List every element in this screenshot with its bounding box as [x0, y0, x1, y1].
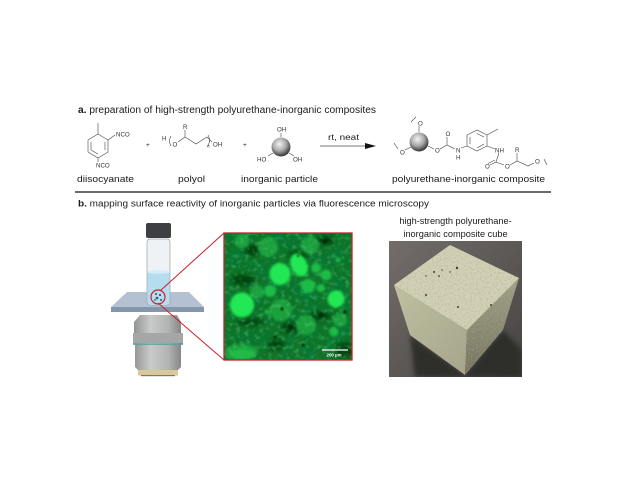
glass slide [111, 292, 204, 312]
reaction arrow: rt, neat [328, 132, 360, 142]
structure: composite: O [400, 150, 405, 156]
structure: inorganic particle: HO [257, 156, 266, 164]
heading a: a. preparation of high-strength polyurethane-inorganic composites [78, 105, 376, 116]
reaction arrow [320, 132, 376, 149]
cube caption: inorganic composite cube [403, 229, 508, 239]
structure: composite: O [435, 148, 440, 154]
structure: composite: O [418, 120, 423, 128]
structure: composite [394, 117, 547, 170]
frame [224, 233, 352, 360]
cube caption: high-strength polyurethane- [399, 216, 512, 226]
label: composite: polyurethane-inorganic composite [392, 174, 545, 184]
structure: composite: R [515, 147, 520, 154]
speckle noise [224, 233, 352, 360]
structure: inorganic particle [257, 126, 302, 164]
structure: polyol: R [183, 124, 188, 131]
dark mottling [224, 233, 352, 360]
fluorescence micrograph [224, 233, 355, 360]
structure: inorganic particle: OH [277, 126, 286, 134]
infographic [75, 106, 551, 377]
label: diisocyanate: diisocyanate [77, 174, 134, 184]
objective lens [133, 315, 183, 376]
photo of composite cube [389, 241, 522, 377]
bright blobs [230, 251, 344, 318]
cube right face [465, 278, 519, 375]
label: polyol: polyol [178, 174, 205, 184]
scale label: 200 µm [326, 352, 342, 358]
microscope illustration [111, 223, 224, 376]
structure: inorganic particle: OH [293, 156, 302, 164]
structure: composite: O [485, 164, 490, 170]
divider [75, 191, 551, 193]
cube left face [394, 285, 467, 375]
structure: composite: O [505, 164, 510, 170]
structure: composite: NH [495, 148, 504, 154]
structure: polyol: OH [213, 142, 222, 148]
structure: polyol: H [162, 136, 166, 142]
structure: diisocyanate [88, 123, 130, 170]
medium blobs [224, 234, 347, 360]
structure: polyol: n [207, 144, 210, 148]
label: inorganic particle: inorganic particle [241, 174, 318, 184]
plus sign: + [243, 142, 247, 149]
pores [425, 267, 492, 308]
structure: diisocyanate: NCO [96, 162, 110, 170]
plus sign: + [146, 142, 150, 149]
heading b: b. mapping surface reactivity of inorganic particles via fluorescence microscopy [78, 199, 429, 210]
particles in vial [154, 293, 162, 301]
dark patches [231, 235, 355, 358]
magnifier circle [151, 290, 165, 304]
structure: diisocyanate: NCO [116, 132, 130, 138]
surface texture [395, 246, 516, 330]
structure: composite: H [456, 154, 460, 162]
structure: polyol [162, 124, 222, 148]
scale bar [322, 349, 348, 351]
structure: composite: N [456, 148, 460, 154]
structure: polyol: O [172, 142, 178, 148]
vial [146, 223, 171, 305]
cube top face [394, 245, 519, 330]
structure: composite: O [535, 158, 540, 166]
dark pits [274, 238, 346, 346]
structure: composite: O [446, 131, 450, 138]
zoom callout lines [158, 233, 224, 360]
